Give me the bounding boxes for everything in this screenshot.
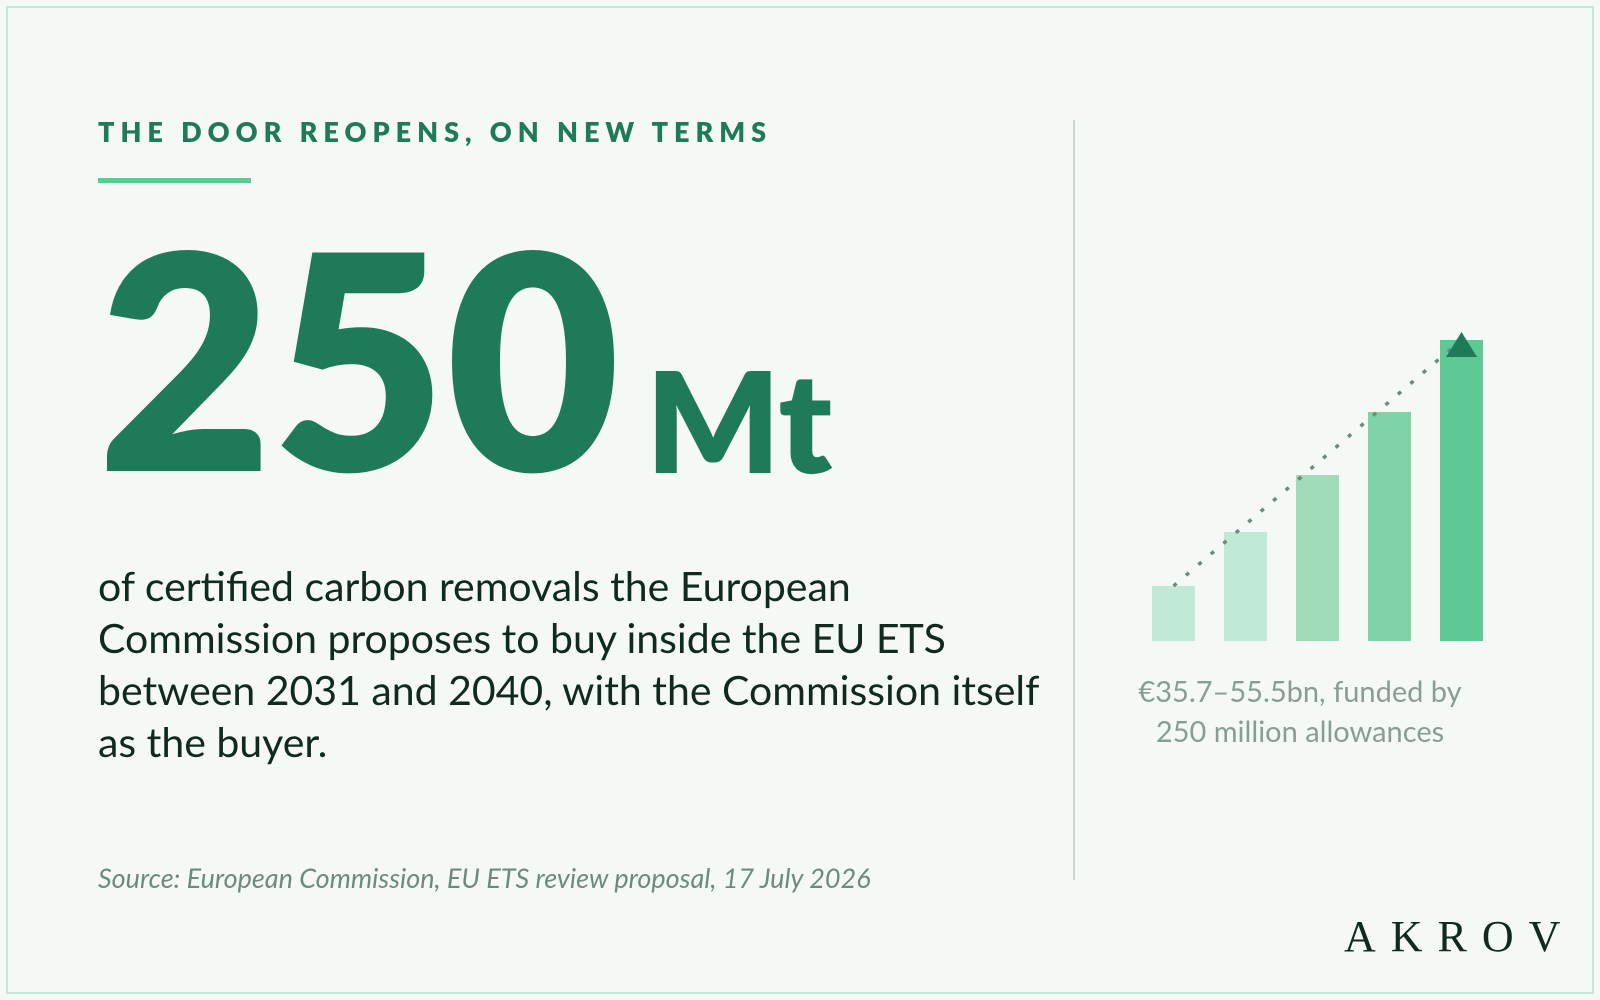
- bar 4: [1368, 412, 1411, 641]
- big number: 250 Mt: [98, 175, 832, 535]
- accent rule: [98, 178, 251, 183]
- description text: between 2031 and 2040, with the Commission itself: [98, 665, 1039, 714]
- bar 1: [1152, 586, 1195, 641]
- description text: of certified carbon removals the European: [98, 561, 851, 610]
- chart caption: €35.7–55.5bn, funded by: [1138, 674, 1462, 709]
- description text: [98, 561, 1040, 766]
- dotted trend line: [1174, 340, 1462, 586]
- brand wordmark: AKROV: [1344, 912, 1575, 961]
- bar 3: [1296, 475, 1339, 641]
- bar 5: [1440, 340, 1483, 641]
- source note: Source: European Commission, EU ETS review proposal, 17 July 2026: [98, 861, 871, 894]
- chart caption: 250 million allowances: [1156, 714, 1444, 749]
- icon: arrowhead triangle: [1446, 332, 1477, 357]
- unit Mt: Mt: [646, 335, 832, 503]
- vertical divider: [1073, 120, 1075, 880]
- description text: as the buyer.: [98, 717, 327, 766]
- rising bar chart: [1152, 332, 1483, 641]
- bar 2: [1224, 532, 1267, 641]
- chart caption: [1138, 674, 1462, 749]
- description text: Commission proposes to buy inside the EU ETS: [98, 613, 946, 662]
- number 250: 250: [98, 175, 620, 535]
- eyebrow heading: THE DOOR REOPENS, ON NEW TERMS: [98, 115, 772, 148]
